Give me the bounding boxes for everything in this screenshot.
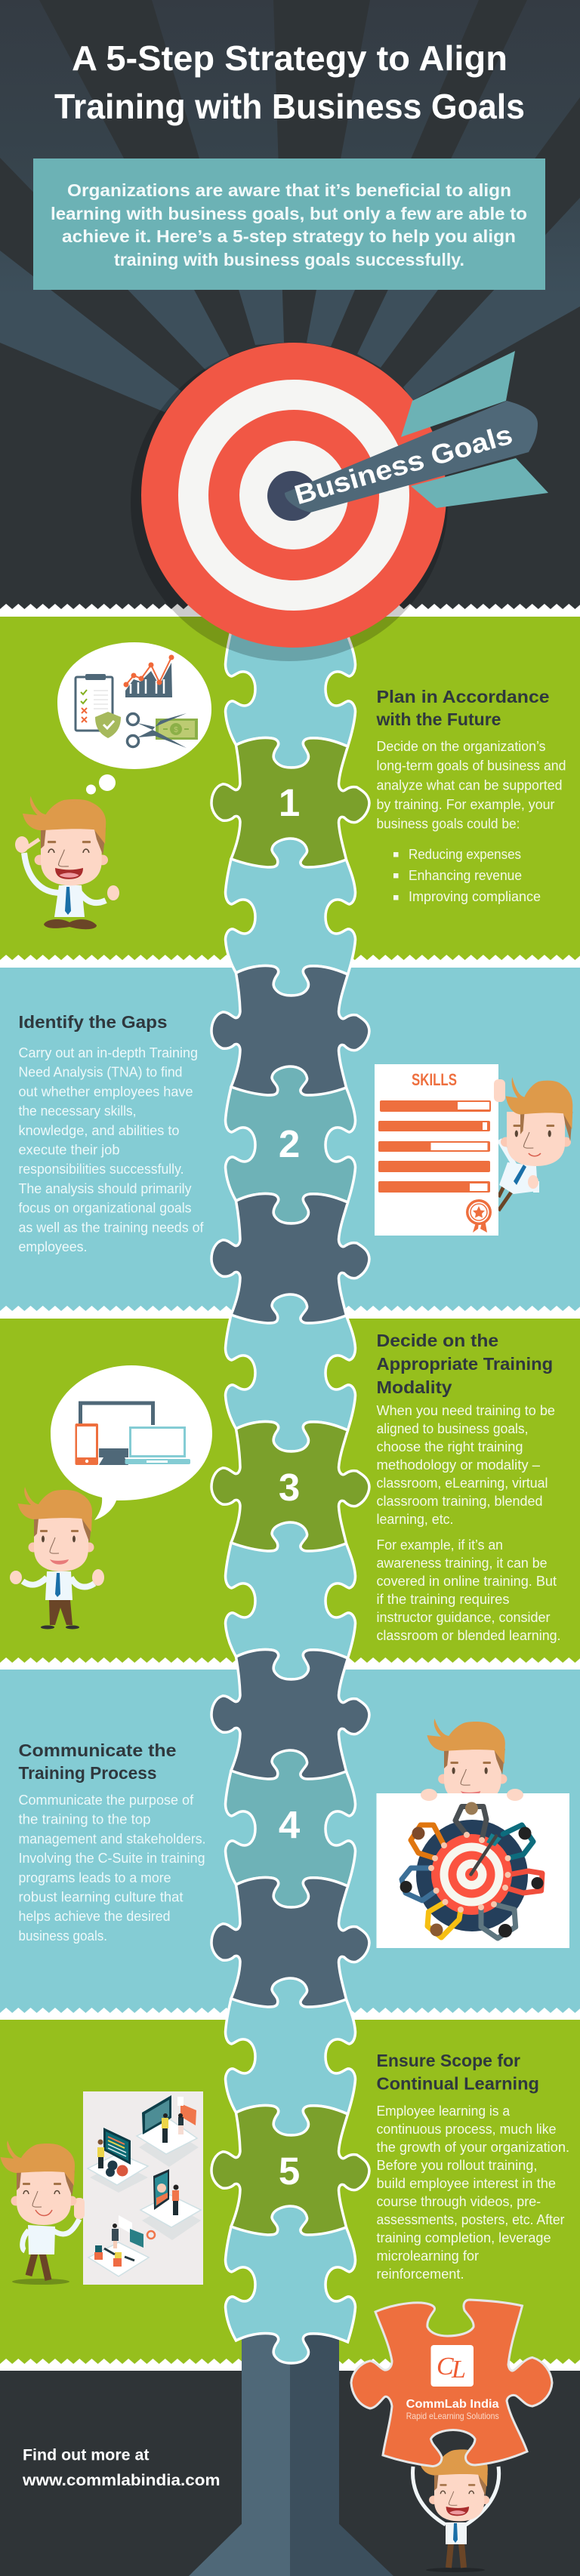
scene: chart board with gears (97, 2128, 131, 2177)
skills sheet (375, 1064, 498, 1236)
step number 1: 1 (279, 781, 300, 824)
text: step 5 body: training completion, leverage (376, 2230, 551, 2245)
text: step 4 body: management and stakeholders. (18, 1831, 205, 1846)
list: step 1 bullets: Enhancing revenue (409, 868, 522, 883)
text: step 3 body (376, 1403, 560, 1643)
text: step 5 body: the growth of your organization. (376, 2140, 569, 2155)
text: step 3 body: aligned to business goals, (376, 1421, 529, 1436)
scene: white platforms (88, 2119, 201, 2276)
puzzle column: interlocking pieces (211, 737, 369, 2235)
sunburst rays (0, 0, 580, 412)
text: step 2 body: knowledge, and abilities to (18, 1123, 180, 1138)
intro panel: achieve it. Here’s a 5-step strategy to help you align (62, 226, 516, 246)
text: step 3 body: classroom or blended learning. (376, 1628, 560, 1643)
logo puzzle piece (351, 2300, 552, 2467)
title: Training with Business Goals (54, 87, 525, 126)
text: step 3 body: awareness training, it can be (376, 1556, 547, 1571)
text: step 1 body: Decide on the organization’s (376, 739, 545, 754)
text: step 3 body: For example, if it’s an (376, 1537, 503, 1553)
brand tagline: Rapid eLearning Solutions (406, 2411, 499, 2421)
heading: step 5 (376, 2051, 539, 2094)
footer call to action: Find out more at (23, 2447, 150, 2464)
character: explaining man (10, 1487, 104, 1629)
text: step 1 body: business goals could be: (376, 817, 520, 832)
text: step 2 body: Carry out an in-depth Training (18, 1045, 198, 1060)
heading: step 5: Ensure Scope for (376, 2051, 520, 2070)
puzzle column: vertical pieces (225, 609, 355, 2363)
illustration: team around target table (400, 1802, 544, 1938)
text: step 4 body (18, 1793, 205, 1944)
step number 3: 3 (279, 1466, 300, 1509)
pillar base (189, 2334, 393, 2576)
step number 5: 5 (279, 2150, 300, 2193)
intro panel (33, 158, 545, 290)
text: step 1 body: by training. For example, your (376, 797, 555, 812)
speech bubble with devices (51, 1365, 212, 1520)
target with arrow (131, 343, 548, 661)
panel: step 4 (18, 1719, 569, 1948)
panel: step 5 (0, 2051, 569, 2285)
text: step 1 body (376, 739, 566, 832)
heading: step 3: Appropriate Training (376, 1354, 553, 1374)
text: step 2 body: the necessary skills, (18, 1103, 136, 1119)
text: step 1 body: analyze what can be supported (376, 777, 562, 792)
text: step 3 body: learning, etc. (376, 1512, 453, 1527)
icon: laptop (125, 1428, 190, 1464)
text: step 3 body: When you need training to be (376, 1403, 555, 1418)
text: step 2 body (18, 1045, 204, 1254)
text: step 2 body: responsibilities successfully. (18, 1162, 184, 1177)
title (54, 38, 525, 126)
intro panel: Organizations are aware that it’s beneficial to align (67, 180, 511, 200)
icon: smartphone (76, 1423, 98, 1465)
text: step 5 body (376, 2104, 569, 2282)
title: A 5-Step Strategy to Align (72, 38, 508, 78)
text: step 3 body: classroom, eLearning, virtual (376, 1476, 548, 1491)
icon: clipboard checklist (76, 674, 121, 738)
footer call to action: www.commlabindia.com (22, 2472, 221, 2489)
character: man beside card (0, 2141, 85, 2285)
intro panel: training with business goals successfully. (114, 250, 464, 269)
text: step 3 body: methodology or modality – (376, 1457, 540, 1473)
text: step 3 body: choose the right training (376, 1439, 523, 1454)
text: step 5 body: course through videos, pre- (376, 2194, 541, 2209)
scene: phone video call (153, 2169, 179, 2215)
list: step 1 bullets: Reducing expenses (409, 847, 521, 862)
panel: step 1 (15, 642, 566, 929)
heading: step 5: Continual Learning (376, 2074, 539, 2094)
heading: step 2: Identify the Gaps (18, 1012, 168, 1032)
text: step 5 body: reinforcement. (376, 2267, 464, 2282)
text: step 5 body: build employee interest in the (376, 2176, 556, 2191)
panel: step 3 (10, 1331, 560, 1643)
heading: step 3: Modality (376, 1377, 452, 1397)
scene: platform shadows (90, 2128, 201, 2240)
intro panel: learning with business goals, but only a few are able to (51, 204, 527, 223)
text: step 5 body: Before you rollout training, (376, 2158, 538, 2173)
text: step 2 body: as well as the training needs of (18, 1220, 204, 1235)
text: step 2 body: employees. (18, 1239, 88, 1254)
text: step 4 body: robust learning culture that (18, 1890, 183, 1905)
text: step 2 body: execute their job (18, 1143, 119, 1158)
step number 4: 4 (279, 1803, 301, 1846)
text: step 4 body: business goals. (18, 1928, 107, 1944)
text: step 5 body: microlearning for (376, 2248, 479, 2264)
character: man behind skills sheet (375, 1064, 572, 1236)
illustration: learning scenes card (83, 2091, 203, 2285)
brand name: CommLab India (406, 2398, 499, 2411)
thought bubble with icons (57, 642, 211, 794)
logo mark: L (451, 2356, 466, 2384)
icon: desktop stand (99, 1448, 128, 1465)
skills sheet: SKILLS (412, 1070, 457, 1089)
heading: step 3: Decide on the (376, 1331, 498, 1350)
icon: award badge (466, 1199, 492, 1233)
text: step 2 body: The analysis should primarily (18, 1181, 192, 1196)
text: step 1 body: long-term goals of business and (376, 759, 566, 774)
footer call to action (22, 2447, 221, 2489)
text: step 4 body: Involving the C-Suite in training (18, 1851, 205, 1866)
text: step 4 body: Communicate the purpose of (18, 1793, 194, 1808)
heading: step 1 (375, 687, 550, 729)
icon: rising chart (124, 655, 174, 697)
text: step 4 body: the training to the top (18, 1812, 151, 1827)
text: step 5 body: Employee learning is a (376, 2104, 511, 2119)
icon: scissors cutting money (127, 713, 198, 748)
heading: step 1: with the Future (375, 709, 501, 729)
list: step 1 bullets: Improving compliance (409, 889, 541, 904)
list: step 1 bullets (393, 847, 541, 904)
text: step 3 body: instructor guidance, consider (376, 1610, 551, 1625)
text: step 3 body: if the training requires (376, 1592, 509, 1607)
icon: monitor (80, 1403, 153, 1425)
icon: scissors cutting money: $ (174, 726, 178, 734)
heading: step 4: Training Process (18, 1763, 157, 1783)
step number 2: 2 (279, 1122, 300, 1165)
text: step 2 body: focus on organizational goals (18, 1201, 192, 1216)
logo mark (430, 2345, 474, 2387)
text: step 5 body: assessments, posters, etc. After (376, 2212, 565, 2227)
logo mark: C (437, 2353, 454, 2381)
heading: step 1: Plan in Accordance (376, 687, 550, 706)
heading: step 3 (376, 1331, 553, 1397)
panel: step 2 (18, 1012, 572, 1254)
text: step 3 body: covered in online training. But (376, 1574, 557, 1589)
heading: step 4: Communicate the (18, 1740, 177, 1760)
text: step 4 body: programs leads to a more (18, 1870, 171, 1885)
character: man lifting logo piece (413, 2447, 499, 2572)
character: man holding board (376, 1719, 569, 1948)
text: step 3 body: classroom training, blended (376, 1494, 542, 1509)
text: step 5 body: continuous process, much like (376, 2122, 556, 2137)
text: step 4 body: helps achieve the desired (18, 1909, 171, 1924)
heading: step 4 (18, 1740, 177, 1783)
text: step 2 body: Need Analysis (TNA) to find (18, 1065, 183, 1080)
text: step 2 body: out whether employees have (18, 1084, 193, 1099)
target with arrow: Business Goals (291, 419, 516, 510)
scene: video wall (142, 2095, 196, 2143)
scene: classroom (94, 2215, 155, 2267)
character: seated man (15, 796, 119, 929)
